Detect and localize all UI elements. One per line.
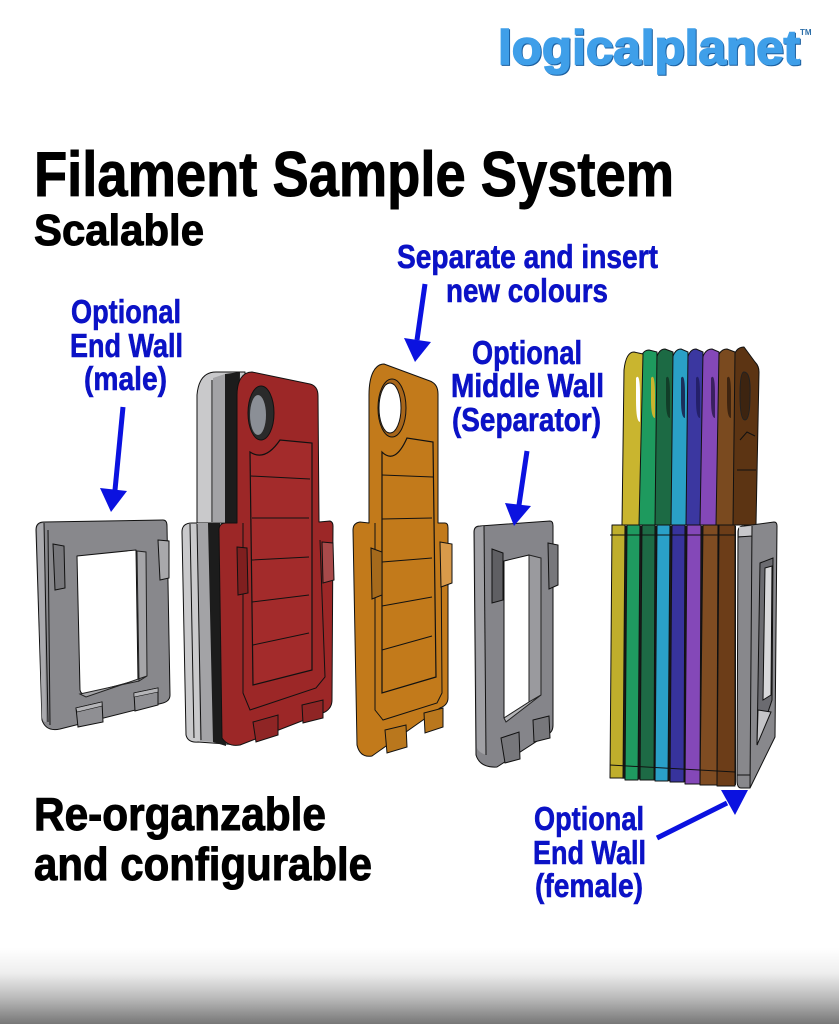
heading: Re-organzable and configurable (34, 788, 372, 890)
arrow: to male end wall (100, 407, 127, 512)
arrow: to female end wall (657, 790, 748, 838)
label: Optional Middle Wall (Separator) (451, 334, 604, 438)
arrow: to middle wall (505, 451, 531, 526)
logo: logicalplanet: logicalplanet (498, 22, 800, 75)
dark backing for strips (612, 526, 736, 785)
bottom gradient band (0, 948, 839, 1024)
title: Filament Sample System (34, 140, 674, 210)
part: stacked red cards (182, 372, 334, 746)
part: female end wall (737, 522, 777, 788)
label: Optional End Wall (female): Optional (534, 800, 644, 837)
insert window with rows (250, 440, 312, 685)
heading: Re-organzable and configurable: Re-organzable (34, 788, 326, 840)
label: Separate and insert new colours: Separate and insert (397, 238, 658, 275)
logo: logicalplanet: TM (800, 28, 812, 37)
label: Optional End Wall (male): Optional (71, 293, 181, 330)
label: Optional End Wall (male): (male) (84, 360, 167, 397)
part: middle wall separator (474, 521, 558, 767)
upper card tops (733, 347, 759, 525)
label: Optional End Wall (female) (533, 800, 646, 904)
lower coloured strips (610, 525, 625, 778)
heading: Re-organzable and configurable: and configurable (34, 838, 372, 890)
label: Optional Middle Wall (Separator): Middle Wall (451, 367, 604, 404)
label: Separate and insert new colours (397, 238, 658, 309)
part: multicolour card stack (610, 347, 759, 786)
arrow: to orange card (404, 284, 431, 362)
grey and black layers behind (182, 372, 245, 745)
label: Optional Middle Wall (Separator): Optional (472, 334, 582, 371)
label: Optional End Wall (male): End Wall (70, 327, 183, 364)
finger hole (248, 386, 274, 440)
red card body (219, 372, 333, 745)
part: male end wall (36, 520, 170, 730)
label: Optional End Wall (female): End Wall (533, 834, 646, 871)
label: Optional End Wall (male) (70, 293, 183, 397)
label: Optional Middle Wall (Separator): (Separator) (452, 401, 601, 438)
label: Optional End Wall (female): (female) (535, 867, 643, 904)
label: Separate and insert new colours: new colours (446, 272, 608, 309)
subtitle: Scalable: Scalable (34, 206, 204, 255)
part: orange card (353, 364, 452, 756)
